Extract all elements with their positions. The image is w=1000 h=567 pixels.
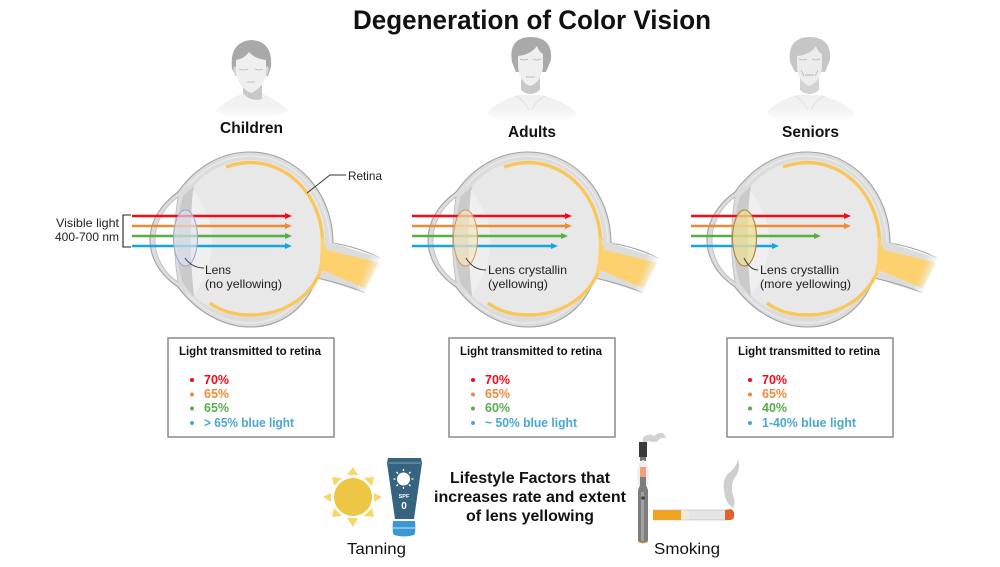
icon: adult portrait (488, 37, 577, 122)
label: lens crystallin: (more yellowing) (760, 277, 851, 291)
label: retina: Retina (348, 169, 382, 183)
data box: children: > 65% blue light (204, 416, 295, 430)
data box: children: Light transmitted to retina (179, 344, 321, 358)
heading: children: Children (220, 120, 283, 137)
data box: seniors: 65% (762, 387, 787, 401)
title: Degeneration of Color Vision (353, 5, 711, 35)
panel: adults (412, 37, 658, 437)
data box: adults: 65% (485, 387, 510, 401)
lens: more yellowing (732, 210, 756, 266)
panel: seniors (691, 37, 937, 437)
label: lens: Lens (205, 263, 231, 277)
lens pointer (744, 258, 758, 270)
data box: adults: 70% (485, 373, 510, 387)
label: lens crystallin (760, 263, 851, 291)
heading: adults: Adults (508, 124, 556, 141)
data box: adults: ~ 50% blue light (485, 416, 578, 430)
lens: no yellowing (174, 210, 198, 266)
heading: seniors: Seniors (782, 124, 839, 141)
icon: sunscreen tube: 0 (401, 501, 407, 512)
icon: cigarette with smoke (653, 459, 739, 520)
data box: children: 65% (204, 387, 229, 401)
icon: sunscreen tube: SPF (399, 494, 410, 500)
label: visible light (55, 215, 131, 247)
data box: children: 70% (204, 373, 229, 387)
icon: sunscreen tube (387, 458, 422, 536)
label: lens (205, 263, 282, 291)
label: lens crystallin: Lens crystallin (488, 263, 567, 277)
eye diagram: children (132, 152, 380, 327)
data box: seniors: Light transmitted to retina (738, 344, 880, 358)
label: lens crystallin (488, 263, 567, 291)
lifestyle factors text: increases rate and extent (434, 489, 627, 506)
lens pointer (185, 258, 204, 268)
label: tanning: Tanning (347, 541, 406, 558)
eye diagram: seniors (691, 152, 937, 327)
lens pointer (466, 258, 486, 270)
lifestyle factors text: of lens yellowing (466, 508, 594, 525)
lifestyle factors text: Lifestyle Factors that (450, 470, 611, 487)
data box: adults (449, 338, 615, 437)
label: lens crystallin: (yellowing) (488, 277, 548, 291)
label: lens: (no yellowing) (205, 277, 282, 291)
label: visible light: 400-700 nm (55, 230, 119, 244)
data box: children: 65% (204, 401, 229, 415)
icon: senior portrait (767, 37, 855, 122)
icon: e-cigarette (637, 433, 667, 544)
icon: sun (323, 467, 382, 527)
lens: yellowing (454, 210, 478, 266)
panel: children (55, 40, 382, 437)
light rays (412, 213, 572, 249)
light rays (132, 213, 292, 249)
data box: adults: Light transmitted to retina (460, 344, 602, 358)
data box: seniors (727, 338, 893, 437)
light rays (691, 213, 851, 249)
data box: seniors: 1-40% blue light (762, 416, 857, 430)
lifestyle factors text (434, 470, 627, 525)
eye diagram: adults (412, 152, 658, 327)
label: smoking: Smoking (654, 541, 720, 558)
label: visible light: Visible light (56, 216, 120, 230)
label: lens crystallin: Lens crystallin (760, 263, 839, 277)
retina pointer (307, 175, 346, 193)
data box: seniors: 40% (762, 401, 787, 415)
icon: child portrait (216, 40, 288, 120)
data box: children (168, 338, 334, 437)
data box: seniors: 70% (762, 373, 787, 387)
data box: adults: 60% (485, 401, 510, 415)
